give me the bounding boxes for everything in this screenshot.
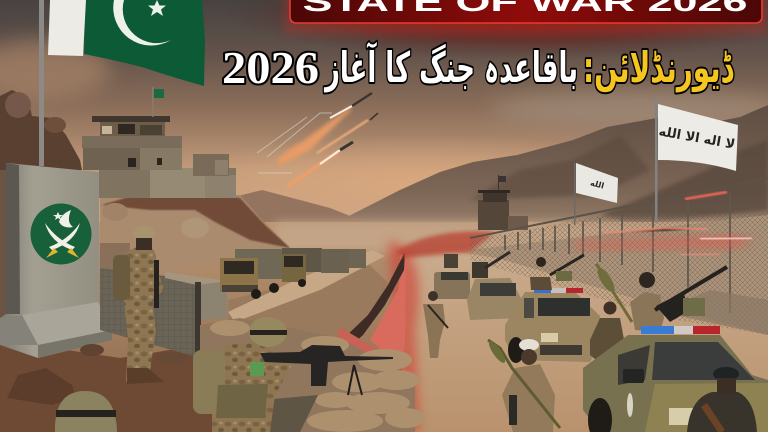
second pickup bbox=[467, 252, 521, 320]
fort flag bbox=[152, 87, 164, 117]
large white flag: لا اله الا الله bbox=[657, 124, 736, 153]
army emblem bbox=[30, 204, 92, 264]
gabion wall bbox=[100, 268, 228, 357]
small white flag: الله bbox=[589, 178, 605, 191]
rocks foreground bbox=[7, 344, 188, 405]
watch tower bbox=[478, 175, 528, 230]
right road bbox=[396, 250, 768, 432]
standing soldier bbox=[113, 226, 164, 384]
background: sky bbox=[0, 0, 768, 260]
walking soldier bbox=[423, 291, 448, 358]
red haze behind right road bbox=[395, 231, 495, 258]
red barrier wall bbox=[335, 240, 420, 432]
fort bbox=[82, 116, 236, 198]
left foreground dirt bbox=[0, 340, 290, 432]
far pickup bbox=[434, 254, 470, 299]
gunner on lead truck bbox=[630, 267, 727, 332]
large white flag bbox=[655, 98, 738, 223]
chain-link fence right bbox=[470, 178, 768, 335]
third pickup gunner bbox=[530, 255, 584, 290]
bottom helmet soldier bbox=[55, 391, 117, 432]
Pakistan flag bbox=[48, 0, 205, 86]
trucks convoy bbox=[220, 248, 366, 299]
rocky outcrop left bbox=[0, 90, 82, 175]
Pakistan flag pole bbox=[39, 0, 44, 166]
lead pickup truck bbox=[583, 326, 768, 432]
turban man with RPG bbox=[590, 264, 632, 363]
field beside supply road bbox=[228, 265, 395, 345]
hill below fort bbox=[100, 190, 292, 272]
sandbags bbox=[200, 318, 425, 432]
supply road bbox=[228, 250, 385, 322]
third pickup bbox=[505, 288, 600, 363]
title banner bbox=[284, 0, 768, 34]
headline: white Urdu: باقاعدہ جنگ کا آغاز bbox=[324, 42, 578, 92]
ground bbox=[0, 222, 768, 432]
right ground haze bbox=[470, 215, 768, 335]
headline: year: 2026 bbox=[222, 42, 319, 93]
background: mountains bbox=[238, 105, 768, 250]
small white flag bbox=[574, 163, 618, 225]
concrete block bbox=[0, 163, 112, 358]
red tracer streaks bbox=[575, 192, 755, 255]
soldier with white turban bbox=[486, 339, 560, 432]
rocky ridge below fort bbox=[102, 192, 290, 248]
firing soldier bbox=[193, 317, 393, 432]
Urdu headline bbox=[222, 42, 735, 93]
left rock strip beside block bbox=[0, 170, 8, 320]
missiles bbox=[257, 93, 378, 187]
barbed wire behind soldier bbox=[100, 243, 130, 270]
turbaned man front right bbox=[687, 367, 757, 432]
